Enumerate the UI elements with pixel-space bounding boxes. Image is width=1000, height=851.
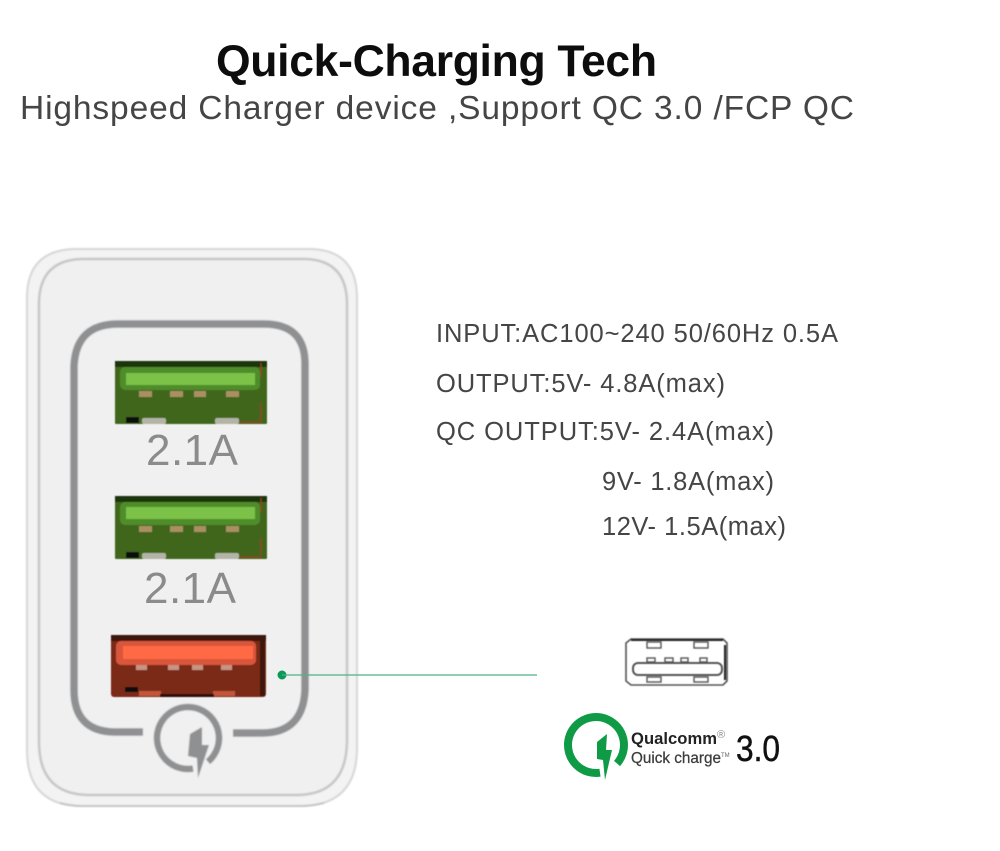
spec text: INPUT:AC100~240 50/60Hz 0.5A (436, 320, 838, 348)
icon: usb port outline (626, 639, 727, 685)
usb port 1 (115, 361, 267, 424)
subtitle: Highspeed Charger device ,Support QC 3.0 /FCP QC (20, 90, 854, 127)
spec text (436, 320, 838, 541)
frame around ports (74, 324, 305, 733)
spec text: OUTPUT:5V- 4.8A(max) (436, 370, 725, 398)
spec text: 12V- 1.5A(max) (602, 513, 786, 541)
port label 1: 2.1A (146, 426, 239, 475)
icon: green quick charge ring (568, 717, 624, 780)
spec text: 9V- 1.8A(max) (602, 468, 774, 496)
charger body (27, 249, 357, 806)
icon: quick charge ring (157, 707, 219, 778)
qualcomm quick charge logo: 3.0 (736, 728, 780, 769)
qualcomm quick charge logo: TM (721, 753, 730, 759)
usb quick charge port (111, 635, 266, 697)
qualcomm quick charge logo: Quick charge (631, 750, 721, 767)
logo text: Qualcomm (631, 729, 717, 748)
usb port 2 (115, 496, 267, 559)
qualcomm quick charge logo: ® (717, 729, 725, 741)
qualcomm quick charge logo (568, 717, 780, 780)
callout line (278, 670, 537, 680)
title: Quick-Charging Tech (216, 37, 657, 86)
spec text: QC OUTPUT:5V- 2.4A(max) (436, 418, 774, 446)
port label 2: 2.1A (144, 564, 237, 613)
